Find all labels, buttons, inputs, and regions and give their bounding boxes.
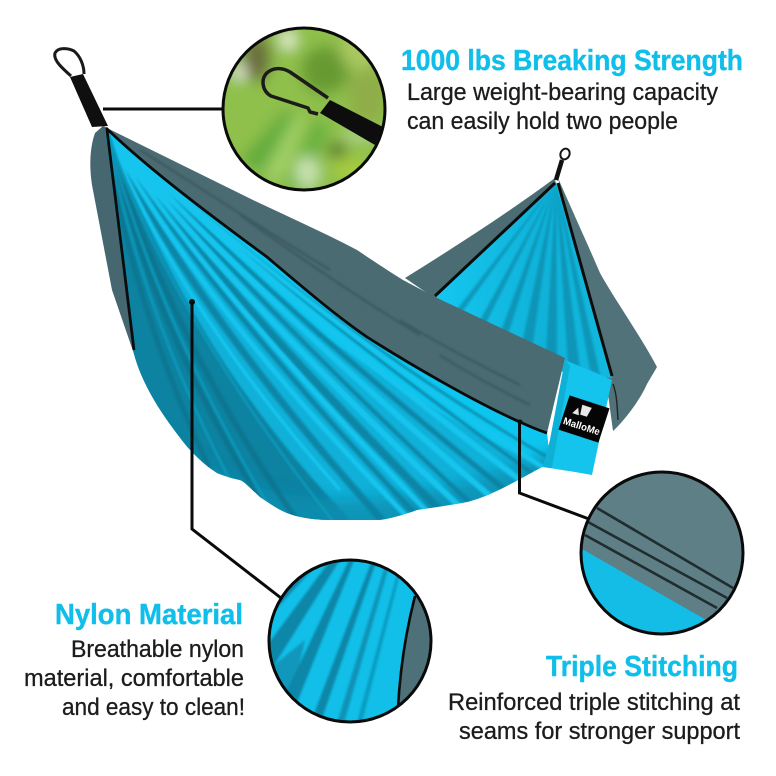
- callout line: breaking strength: [103, 108, 224, 110]
- brand name: MalloMe: [562, 416, 602, 438]
- description: Reinforced triple stitching at: [448, 689, 740, 716]
- text block: breaking strength: can easily hold two people: [407, 108, 678, 135]
- lower body shade: [186, 446, 548, 520]
- black seam lower band: [106, 128, 547, 433]
- body pleats: [105, 128, 570, 540]
- edge seam: [398, 596, 415, 708]
- front hammock section: [55, 49, 612, 540]
- back panel folds: [455, 182, 600, 375]
- text block: triple stitching: seams for stronger support: [459, 718, 740, 745]
- back right gray panel: [558, 178, 657, 431]
- back hammock section: [405, 147, 657, 431]
- callout line: triple stitching: [518, 420, 589, 519]
- back black seams: [435, 183, 612, 376]
- description: Large weight-bearing capacity: [407, 79, 718, 106]
- back carabiner loop: [559, 147, 571, 161]
- heading: 1000 lbs Breaking Strength: [401, 45, 743, 77]
- text block: nylon material: [24, 599, 245, 721]
- heading: Nylon Material: [55, 599, 243, 631]
- pocket shading: [543, 360, 570, 468]
- bright seam region: [200, 208, 548, 467]
- stitch lines: [585, 508, 733, 608]
- zoomed webbing: [320, 100, 383, 145]
- detail circle: stitching: [580, 470, 744, 636]
- pleat shadows: [270, 562, 400, 720]
- description: Breathable nylon: [71, 636, 244, 663]
- detail circle: nylon: [268, 558, 432, 724]
- dark left region: [108, 150, 349, 520]
- left gray panel: [90, 126, 134, 354]
- back blue panel: [435, 182, 612, 378]
- band wrinkles: [140, 150, 530, 405]
- back pull cord: [613, 384, 618, 420]
- bright pleat curves: [105, 128, 544, 516]
- brand label: [558, 395, 610, 443]
- heading: Triple Stitching: [546, 651, 738, 683]
- main carabiner loop: [55, 49, 84, 76]
- back carabiner strap: [556, 160, 562, 180]
- blue fabric: [582, 549, 706, 632]
- stuff pocket: [543, 360, 612, 475]
- callout line: nylon material: [189, 299, 281, 598]
- blurred grass background: [228, 30, 383, 188]
- main gray band: [105, 127, 565, 433]
- black seam left: [107, 130, 134, 350]
- text block: nylon material: material, comfortable: [24, 665, 244, 692]
- lighter left folds: [105, 128, 340, 530]
- dark left folds: [105, 128, 300, 525]
- text block: triple stitching: [448, 651, 740, 745]
- text block: nylon material: and easy to clean!: [62, 694, 245, 721]
- label figure: [572, 403, 592, 418]
- back left gray panel: [405, 178, 556, 302]
- detail circle: carabiner: [222, 26, 386, 192]
- text block: breaking strength: [401, 45, 743, 135]
- zoomed carabiner: [263, 69, 328, 114]
- main carabiner strap: [70, 74, 108, 127]
- dark pleat curves: [126, 172, 546, 520]
- main blue body: [105, 128, 550, 520]
- gray edge panel: [400, 596, 430, 703]
